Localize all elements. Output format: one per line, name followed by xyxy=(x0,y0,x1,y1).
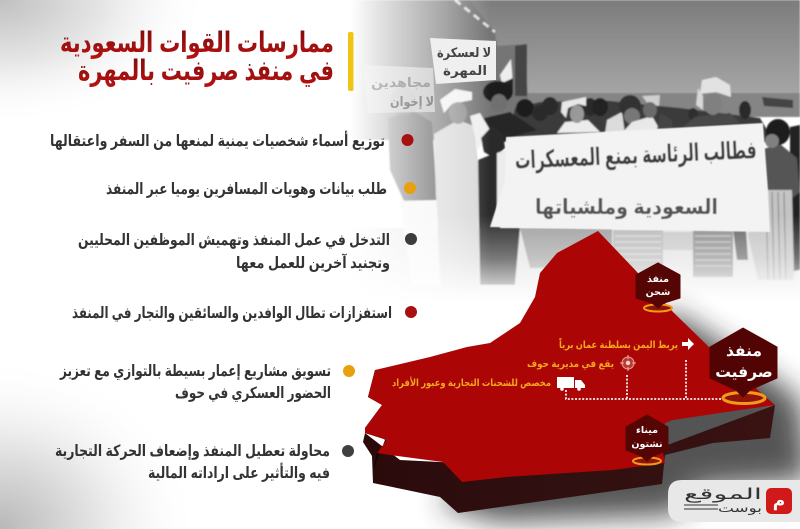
lower crowd xyxy=(520,228,612,268)
child xyxy=(478,153,520,285)
marker: Shahn port: شحن xyxy=(646,287,670,298)
sign: left placard: لا إخوان xyxy=(390,94,434,109)
icon: target xyxy=(620,355,636,371)
map shadow xyxy=(440,310,800,522)
sign: right placard: المهرة xyxy=(443,63,487,78)
marker: Sarfait port xyxy=(710,328,777,404)
marker: Shahn port xyxy=(636,263,680,312)
dotted connector lines xyxy=(566,360,723,399)
list item 5: الحضور العسكري في حوف xyxy=(175,385,331,403)
map of Al-Mahra xyxy=(363,231,775,513)
list item 1: توزيع أسماء شخصيات يمنية لمنعها من السفر واعتقالها xyxy=(50,131,385,150)
protest photo xyxy=(350,0,800,308)
right people xyxy=(790,125,800,272)
marker: Shahn port: منفذ xyxy=(647,274,669,285)
map top surface xyxy=(365,231,775,482)
list item 2: طلب بيانات وهويات المسافرين يوميا عبر المنفذ xyxy=(106,181,387,198)
icon: truck xyxy=(557,377,585,391)
left man xyxy=(388,110,437,201)
label: connects Yemen to Oman: يربط اليمن بسلطنة عمان برياً xyxy=(559,337,678,351)
marker: Nishtun port: ميناء xyxy=(636,425,658,436)
list item 3: التدخل في عمل المنفذ وتهميش الموظفين المحليين xyxy=(78,232,390,250)
list item 5: تسويق مشاريع إعمار بسيطة بالتوازي مع تعزيز xyxy=(59,363,331,381)
crowd band xyxy=(510,100,770,142)
list item 6: محاولة تعطيل المنفذ وإضعاف الحركة التجارية xyxy=(55,443,330,460)
sign: right placard xyxy=(430,38,496,84)
marker: Nishtun port: نشتون xyxy=(631,439,663,450)
list item 6 xyxy=(55,443,354,482)
list item 3: وتجنيد آخرين للعمل معها xyxy=(236,253,390,272)
list item 3 xyxy=(78,232,417,272)
protest banner: السعودية وملشياتها xyxy=(535,196,718,219)
logo: الموقع xyxy=(684,486,762,503)
map left cliff xyxy=(365,370,387,470)
list item 5 xyxy=(59,363,355,403)
man in white xyxy=(433,121,480,234)
title xyxy=(60,27,334,87)
logo xyxy=(668,480,800,522)
list item 6: فيه والتأثير على اراداته المالية xyxy=(148,463,330,482)
marker: Sarfait port: منفذ xyxy=(726,343,762,360)
title accent bar xyxy=(348,32,354,91)
label: located in Hawf: يقع في مديرية حوف xyxy=(527,359,614,370)
logo: م xyxy=(773,491,785,510)
icon: arrow xyxy=(682,338,694,350)
sign: left placard: مجاهدين xyxy=(371,75,431,90)
title: ممارسات القوات السعودية xyxy=(60,27,334,59)
logo: بوست xyxy=(718,501,762,516)
marker: Sarfait port: صرفيت xyxy=(715,364,773,381)
sign: right placard: لا لعسكرة xyxy=(437,45,491,60)
list item 4: استفزازات تطال الوافدين والسائقين والتجار في المنفذ xyxy=(72,305,392,323)
marker: Nishtun port xyxy=(626,415,668,464)
label: dedicated to trade shipments: مخصص للشحنات التجارية وعبور الأفراد xyxy=(392,376,551,389)
protest banner xyxy=(490,123,770,232)
sign: left placard xyxy=(363,65,435,113)
map extrusion side xyxy=(363,405,775,513)
title: في منفذ صرفيت بالمهرة xyxy=(78,55,334,87)
